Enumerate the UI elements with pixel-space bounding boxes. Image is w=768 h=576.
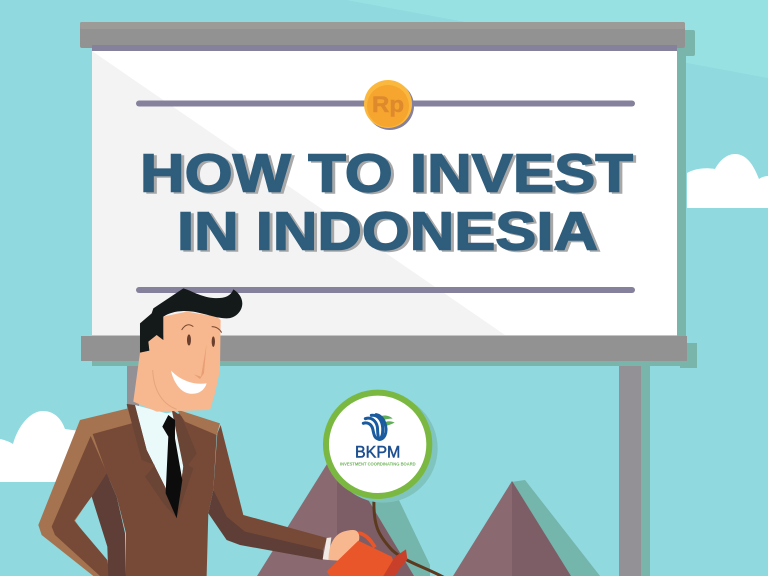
billboard posts bbox=[127, 361, 650, 576]
jacket: right shoulder bbox=[177, 409, 220, 435]
shirt bbox=[135, 405, 183, 513]
billboard bottom bar bbox=[81, 336, 687, 361]
BKPM badge: BKPM bbox=[355, 442, 400, 461]
icon: rupiah coin: Rp bbox=[372, 92, 404, 117]
jacket: right arm bbox=[213, 425, 327, 550]
cloud: left bbox=[0, 411, 80, 482]
title: HOW TO INVEST bbox=[143, 145, 636, 205]
eyes bbox=[187, 334, 215, 347]
watering can and hand bbox=[323, 530, 407, 576]
title: IN INDONESIA bbox=[177, 202, 598, 262]
billboard bbox=[80, 22, 697, 576]
lapel: left bbox=[127, 404, 177, 518]
nose bbox=[194, 343, 207, 379]
divider: top bbox=[136, 100, 635, 106]
billboard panel bbox=[92, 51, 677, 335]
title: IN INDONESIA bbox=[180, 203, 601, 263]
eyebrows bbox=[182, 325, 222, 333]
jacket: left sleeve highlight bbox=[38, 408, 133, 576]
hair bbox=[140, 288, 242, 353]
icon: BKPM logo bbox=[363, 415, 395, 439]
can body bbox=[327, 541, 395, 576]
billboard top bar bbox=[80, 22, 685, 51]
divider: bottom bbox=[136, 287, 635, 293]
jacket: inner shadow bbox=[92, 473, 126, 576]
jacket: torso bbox=[93, 413, 217, 576]
can handle bbox=[337, 533, 375, 560]
tie bbox=[162, 415, 182, 518]
cuff bbox=[323, 537, 331, 560]
title: HOW TO INVEST bbox=[140, 144, 633, 204]
BKPM badge: INVESTMENT COORDINATING BOARD bbox=[340, 462, 416, 467]
hand bbox=[329, 530, 359, 561]
lapel: right bbox=[172, 409, 197, 518]
jacket: right arm shadow bbox=[208, 490, 323, 560]
can spout bbox=[383, 549, 407, 576]
businessman bbox=[38, 288, 327, 576]
billboard shadows bbox=[92, 30, 697, 368]
title bbox=[140, 144, 636, 263]
face bbox=[133, 312, 221, 412]
icon: rupiah coin bbox=[364, 80, 414, 130]
cloud: right bbox=[687, 154, 768, 208]
jaw line bbox=[153, 370, 177, 409]
mountain: left bbox=[257, 448, 430, 576]
plant stem bbox=[374, 498, 445, 576]
BKPM badge bbox=[326, 393, 438, 503]
smile bbox=[171, 371, 207, 394]
mountain: right bbox=[453, 480, 600, 576]
jacket: left sleeve bbox=[52, 436, 110, 576]
